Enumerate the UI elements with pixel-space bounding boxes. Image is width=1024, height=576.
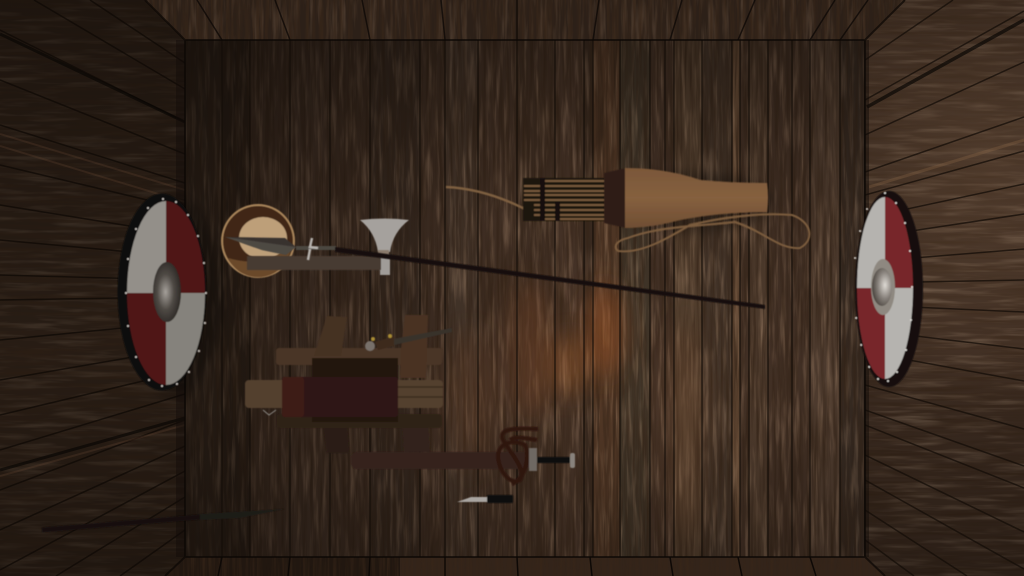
- shield rim: [855, 191, 923, 387]
- sword pommel: [570, 453, 575, 468]
- quiver collar: [604, 168, 626, 228]
- armour stand: [245, 315, 452, 453]
- right wall: [865, 0, 1024, 576]
- shield quarters: [855, 195, 915, 381]
- quiver body: [625, 168, 768, 228]
- shield boss: [153, 262, 181, 322]
- left shield: [118, 194, 221, 396]
- back wall: [185, 40, 865, 557]
- small mark: [263, 410, 276, 415]
- wooden log: [245, 380, 443, 408]
- shield quarters: [126, 200, 206, 386]
- bow tip: [446, 187, 536, 215]
- ceiling planks: [145, 0, 905, 40]
- bow and quiver: [446, 168, 809, 251]
- sword grip: [537, 457, 571, 463]
- spear lugs: [308, 238, 318, 260]
- shield rim: [118, 194, 206, 390]
- long spear: [225, 237, 765, 309]
- bowl with bread: [221, 204, 295, 278]
- sword in scabbard: [351, 429, 575, 484]
- small knife: [457, 495, 513, 503]
- bowstring rope: [616, 214, 809, 251]
- stand uprights: [314, 316, 347, 356]
- floor planks: [165, 557, 885, 576]
- axe handle: [247, 256, 381, 270]
- spear head: [225, 237, 296, 255]
- right shield: [854, 191, 923, 387]
- scabbard: [351, 452, 531, 469]
- corner edges: [145, 0, 905, 576]
- spear on left wall: [42, 509, 285, 530]
- belt coils: [498, 429, 538, 484]
- leather armour: [312, 358, 398, 422]
- battle axe: [247, 218, 409, 275]
- shield rivets: [125, 198, 207, 387]
- spear shaft: [335, 247, 765, 309]
- sword guard: [529, 448, 537, 471]
- dagger on stand: [393, 328, 452, 345]
- shield boss: [871, 259, 895, 315]
- left wall: [0, 0, 185, 576]
- arrow shafts: [523, 178, 605, 221]
- shield rivets: [854, 192, 913, 382]
- axe blade: [360, 218, 409, 252]
